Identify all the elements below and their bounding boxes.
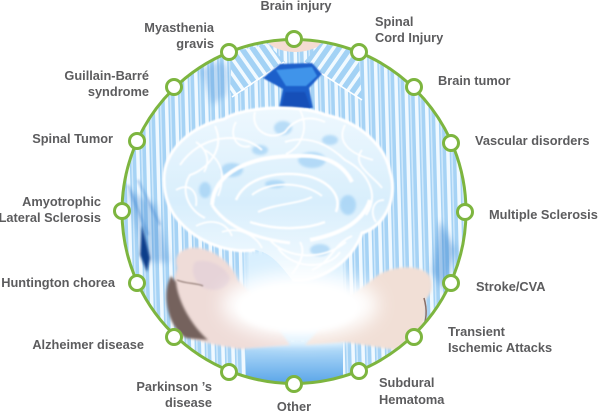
ring nodes [114, 32, 472, 392]
photo: man in striped shirt holding glowing brain [120, 38, 470, 388]
central glow [222, 272, 378, 338]
labels: syndrome [88, 84, 149, 99]
left hand [166, 248, 290, 349]
labels: Cord Injury [375, 30, 444, 45]
labels: Brain tumor [438, 73, 511, 88]
labels: Multiple Sclerosis [489, 207, 598, 222]
labels: Huntington chorea [1, 275, 116, 290]
tie [263, 63, 322, 108]
labels: Lateral Sclerosis [0, 210, 101, 225]
labels: Subdural [379, 375, 434, 390]
soft glow below brain [245, 250, 345, 345]
labels: Transient [448, 324, 506, 339]
labels: Alzheimer disease [32, 337, 144, 352]
labels: gravis [176, 36, 214, 51]
labels: Spinal Tumor [32, 131, 113, 146]
labels: Guillain-Barré [64, 68, 149, 83]
right hand [305, 267, 432, 350]
labels: Stroke/CVA [476, 279, 545, 294]
labels: Ischemic Attacks [448, 340, 552, 355]
collar [230, 44, 362, 100]
labels: Vascular disorders [475, 133, 590, 148]
skin at neck [268, 41, 322, 52]
labels: Hematoma [379, 392, 445, 407]
labels: Parkinson ’s [136, 379, 212, 394]
ring [122, 40, 466, 384]
labels: Myasthenia [144, 20, 215, 35]
labels: Amyotrophic [22, 194, 101, 209]
brain [164, 108, 392, 280]
labels: disease [165, 395, 212, 410]
shirt [120, 38, 470, 388]
labels: Spinal [375, 14, 413, 29]
